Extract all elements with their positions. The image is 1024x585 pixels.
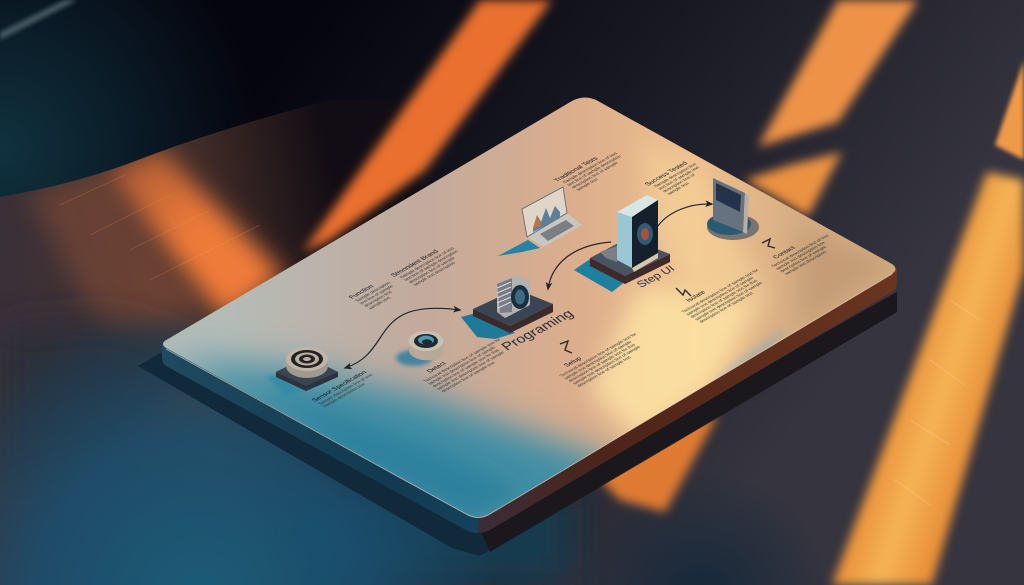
shading: teal shadow [170, 360, 625, 540]
text block: detect: sample text description line of sample [435, 350, 506, 390]
text block: contact: sample text description [783, 250, 828, 275]
icon: laptop with charts [498, 187, 582, 256]
text block: setup: sample text description line of sample [571, 345, 642, 385]
text block: success: sample text [666, 181, 691, 195]
text block: traditional: sample text [575, 177, 600, 191]
text block: isolate: Technical description line of sample text for [680, 268, 760, 313]
arrow: tower to monitor [658, 204, 712, 226]
label: Step UI: Step UI [635, 264, 678, 290]
icon: book tower on base [574, 195, 670, 292]
text block: statement: Stronndent Brand [390, 249, 441, 278]
text block: contact: Technical description line of text [770, 233, 831, 268]
text block: traditional: text line of sample description [566, 154, 623, 186]
light beam: far right top [995, 60, 1024, 160]
text block: statement [390, 243, 469, 288]
text block: detect [415, 333, 520, 393]
brushed streaks on beam [895, 300, 980, 505]
arrow: tower to camera [548, 242, 611, 289]
light beam: bottom right [832, 172, 1024, 585]
text block: isolate: sample text description line of sample [693, 281, 764, 321]
text block: statement: sample text description [412, 261, 457, 286]
text block: statement: text line of sample description [403, 249, 460, 281]
text block: traditional [553, 148, 632, 193]
highlight: cream beam [590, 285, 760, 440]
board side [162, 268, 897, 533]
brushed streaks [60, 175, 260, 280]
text block: success: Success Tested [644, 161, 690, 187]
light beam: under board [590, 415, 718, 512]
text block: setup: sample text description line of sample [563, 340, 633, 380]
board reflection [138, 292, 897, 556]
text block: contact: Contact [772, 245, 798, 260]
process board [162, 98, 900, 540]
shading: right corner [797, 230, 888, 320]
text block: isolate: description line of sample text [698, 291, 755, 323]
light patch: left brushed surface [0, 100, 420, 585]
text block: sensor: Sensor Specification [311, 370, 369, 403]
text block: detect: sample text description line of sample [427, 345, 497, 385]
text block: sensor: Sample description line of text [317, 373, 375, 405]
text block: success: description line of [661, 173, 697, 193]
text block: traditional: Traditional Tests [553, 156, 601, 183]
step icon: zigzag setup [560, 341, 572, 353]
text block: contact: description line of sample [779, 245, 828, 273]
text block: function: Function [348, 284, 376, 300]
text block: setup: description line of sample text [576, 355, 633, 387]
text block: detect: Technical description line of sample text for [422, 337, 502, 383]
fade: lower floor blend [290, 490, 570, 585]
corner glint [0, 0, 78, 40]
text block: isolate: Isolate [685, 290, 708, 303]
text block: success: Sample description line [652, 162, 698, 188]
icon: monitor on round stand [707, 178, 759, 240]
text block: function: text line of sample [358, 284, 395, 305]
text block: success [644, 159, 711, 197]
label: Programing: Programing [498, 307, 577, 354]
text block: statement: description line of sample [407, 256, 457, 284]
text block: detect: description line of sample text [440, 361, 497, 393]
text block: contact [763, 229, 844, 275]
light beam: top right [758, 0, 918, 147]
board edge highlight [166, 274, 892, 518]
text block: detect: description line of sample text for this [431, 348, 501, 388]
light beam: middle right [745, 152, 842, 216]
text block: setup: description line of sample text for this [567, 343, 637, 382]
text block: function: Sample description [354, 281, 392, 302]
text block: function: sample text [367, 296, 392, 310]
step icon: zigzag contact [762, 239, 775, 248]
text block: setup: Setup [563, 356, 584, 368]
board top face [163, 98, 896, 518]
text block: isolate [672, 263, 778, 323]
text block: isolate: description line of sample text for this [689, 279, 759, 318]
text block: function [348, 277, 405, 310]
text block: statement: Sample description line of text [398, 246, 456, 279]
text block: sensor: Sample description line [321, 382, 367, 408]
text block: setup [551, 328, 656, 387]
step icon: zigzag isolate [676, 288, 691, 296]
text block: detect: Detect [426, 361, 448, 374]
shading: right shadow wedge [714, 327, 788, 380]
text block: isolate: sample text description line of sample [685, 276, 755, 316]
icon: concentric disc on base [266, 347, 338, 395]
text block: traditional: Sample description line of text [561, 151, 619, 184]
text block: traditional: description line of sample [570, 161, 620, 189]
icon: small cylinder [396, 331, 444, 366]
text block: function: description line [363, 290, 394, 307]
arrow: sensor to camera [345, 308, 460, 368]
text block: contact: sample text description line [774, 241, 827, 270]
light beam: top centre [303, 0, 552, 252]
text block: setup: Technical description line of sample text for [558, 332, 638, 377]
text block: success: text line of sample text [657, 165, 701, 190]
icon: camera module on base [461, 275, 553, 339]
